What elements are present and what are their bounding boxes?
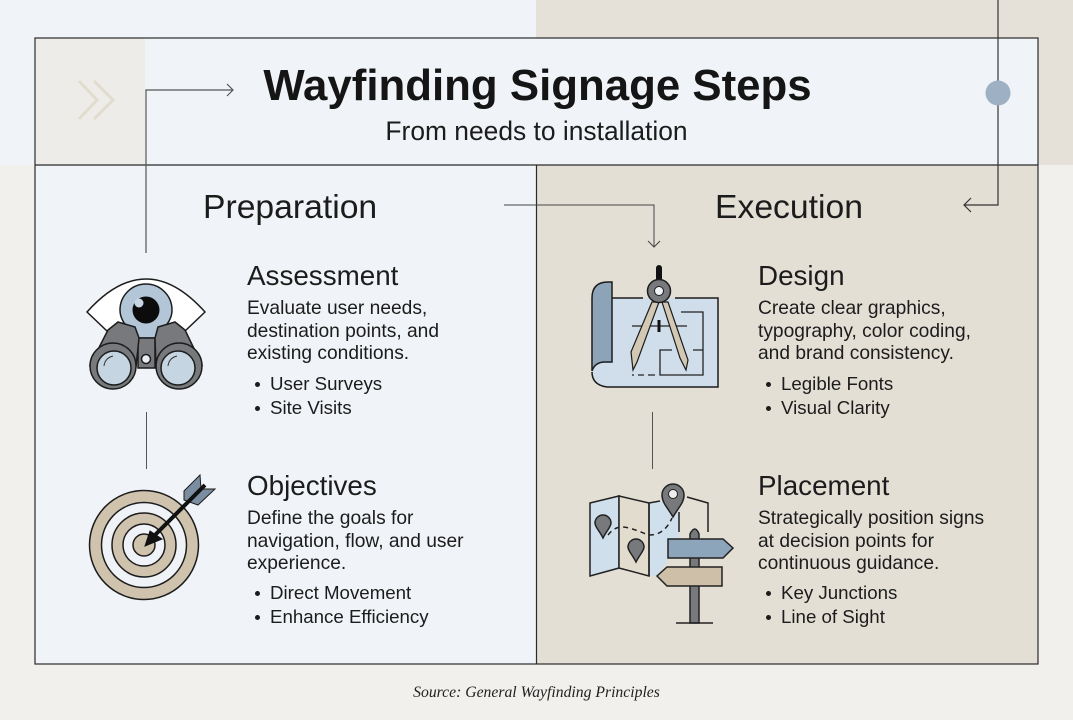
step: Placement: Line of Sight — [781, 606, 885, 627]
step: Objectives: experience. — [247, 553, 346, 574]
title: Wayfinding Signage Steps — [263, 61, 812, 110]
step: Objectives: navigation, flow, and user — [247, 530, 464, 552]
step: Assessment: destination points, and — [247, 320, 439, 342]
step: Design: Design — [758, 260, 845, 291]
heading: Execution: Execution — [715, 188, 863, 226]
icon: eye and binoculars — [86, 278, 206, 390]
step: Assessment — [247, 260, 439, 418]
step: Placement: Placement — [758, 470, 889, 501]
source note: Source: General Wayfinding Principles — [413, 684, 660, 701]
step: Design: Create clear graphics, — [758, 298, 946, 319]
step: Design — [758, 260, 971, 418]
step: Assessment: Assessment — [247, 260, 398, 291]
arrow: preparation to execution — [504, 204, 660, 248]
step: Placement: Strategically position signs — [758, 508, 984, 529]
icon: double chevron — [78, 80, 115, 120]
step: Objectives: Objectives — [247, 470, 377, 501]
step: Placement: continuous guidance. — [758, 553, 939, 574]
step: Assessment: existing conditions. — [247, 343, 409, 364]
heading: Preparation: Preparation — [203, 188, 377, 226]
step: Objectives: Enhance Efficiency — [270, 606, 429, 627]
subtitle: From needs to installation — [385, 116, 688, 146]
step: Design: and brand consistency. — [758, 343, 954, 364]
icon: blueprint and compass — [591, 265, 719, 388]
vertical connector: preparation — [146, 412, 147, 469]
step: Assessment: User Surveys — [270, 373, 382, 394]
step: Design: typography, color coding, — [758, 320, 971, 342]
icon: map and signpost — [589, 483, 734, 624]
step: Placement: at decision points for — [758, 530, 934, 552]
icon: target with arrow — [88, 474, 216, 600]
vertical connector: execution — [652, 412, 653, 469]
step: Placement — [758, 470, 984, 627]
arrow: connector to title — [145, 84, 234, 253]
step: Objectives: Define the goals for — [247, 508, 413, 529]
step: Objectives — [247, 470, 464, 627]
step: Objectives: Direct Movement — [270, 582, 411, 603]
step: Assessment: Evaluate user needs, — [247, 298, 427, 319]
step: Assessment: Site Visits — [270, 397, 352, 418]
step: Placement: Key Junctions — [781, 582, 897, 603]
step: Design: Visual Clarity — [781, 397, 890, 418]
step: Design: Legible Fonts — [781, 373, 893, 394]
arrow: connector to execution — [963, 0, 1010, 212]
